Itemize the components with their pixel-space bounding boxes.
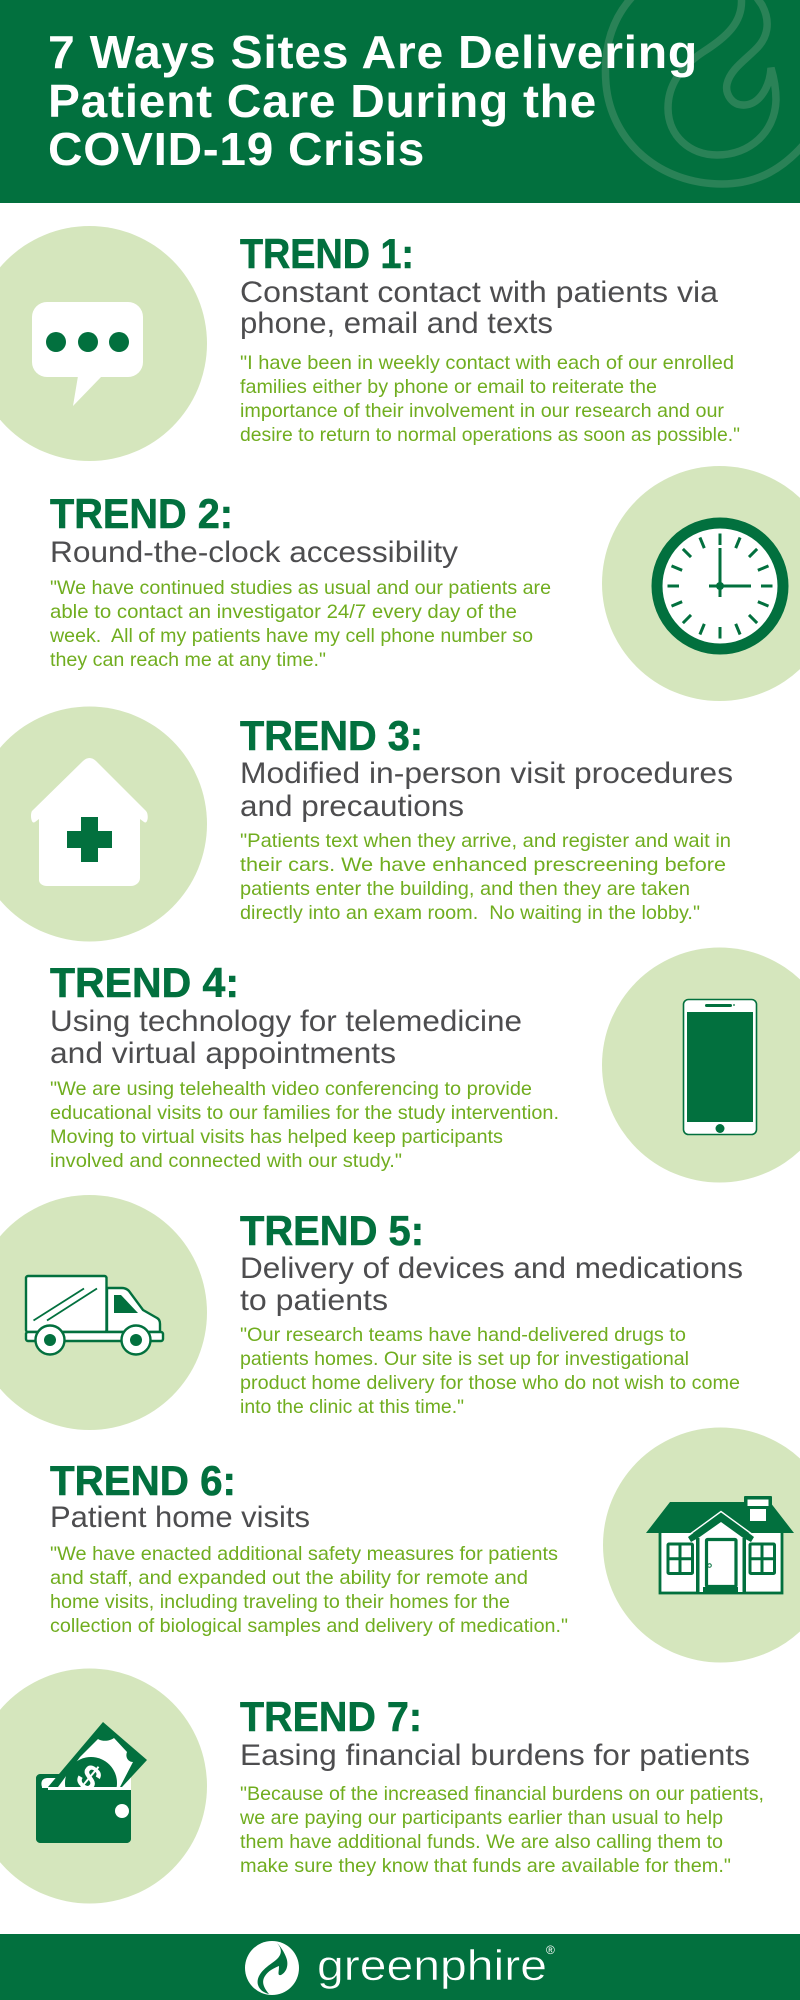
quote: trend 6: [50, 1543, 568, 1637]
subheading: trend 4: [50, 1005, 522, 1070]
heading: trend 2: TREND 2:: [50, 490, 233, 537]
panel: trend 2: [49, 466, 800, 701]
quote: trend 2: [49, 577, 551, 671]
logo wordmark: greenphire: [317, 1942, 547, 1990]
quote: trend 3: "Patients text when they arrive, and register and wait in: [240, 830, 731, 852]
logo wordmark: ®: [546, 1943, 555, 1957]
quote: trend 5: [240, 1324, 740, 1418]
quote: trend 4: "We are using telehealth video conferencing to provide: [50, 1078, 532, 1100]
icon: delivery truck: [0, 1195, 207, 1430]
icon: greenphire logo: [245, 1941, 299, 1995]
quote: trend 7: them have additional funds. We are also calling them to: [240, 1831, 723, 1853]
quote: trend 5: patients homes. Our site is set up for investigational: [240, 1348, 689, 1370]
panel: trend 3: [0, 706, 733, 942]
quote: trend 1: importance of their involvement in our research and our: [240, 400, 725, 422]
subheading: trend 5: to patients: [240, 1284, 388, 1317]
panel: trend 5: [0, 1195, 743, 1430]
subheading: trend 3: Modified in-person visit procedures: [240, 757, 733, 790]
heading: trend 7: TREND 7:: [240, 1693, 422, 1740]
quote: trend 5: into the clinic at this time.": [240, 1396, 464, 1418]
panel: trend 1: [0, 226, 740, 461]
quote: trend 2: able to contact an investigator 24/7 every day of the: [50, 601, 517, 623]
title: Patient Care During the: [48, 75, 597, 127]
subheading: trend 3: and precautions: [240, 790, 464, 823]
subheading: trend 4: Using technology for telemedicine: [50, 1005, 522, 1038]
subheading: trend 1: [240, 276, 719, 340]
icon: smartphone: [602, 948, 800, 1182]
footer band: [0, 1934, 800, 2000]
subheading: trend 5: [240, 1252, 743, 1317]
quote: trend 2: "We have continued studies as usual and our patients are: [50, 577, 551, 599]
quote: trend 3: directly into an exam room. No waiting in the lobby.": [240, 902, 700, 924]
heading: trend 1: TREND 1:: [240, 230, 414, 277]
quote: trend 4: [50, 1078, 559, 1172]
subheading: trend 4: and virtual appointments: [50, 1037, 396, 1070]
header banner: [0, 0, 800, 203]
heading: trend 4: TREND 4:: [50, 959, 239, 1006]
quote: trend 5: product home delivery for those who do not wish to come: [240, 1372, 740, 1394]
quote: trend 6: "We have enacted additional safety measures for patients: [50, 1543, 558, 1565]
quote: trend 1: [240, 352, 740, 446]
icon: clock: [602, 466, 800, 701]
subheading: trend 5: Delivery of devices and medications: [240, 1252, 743, 1285]
subheading: trend 1: Constant contact with patients via: [240, 276, 719, 309]
panel: trend 6: [50, 1428, 800, 1662]
quote: trend 3: [240, 830, 731, 924]
title: [48, 26, 698, 175]
quote: trend 7: make sure they know that funds are available for them.": [240, 1855, 731, 1877]
quote: trend 3: patients enter the building, and then they are taken: [240, 878, 690, 900]
heading: trend 6: TREND 6:: [50, 1457, 236, 1504]
heading: trend 3: TREND 3:: [240, 712, 423, 759]
quote: trend 4: Moving to virtual visits has helped keep participants: [50, 1126, 503, 1148]
quote: trend 5: "Our research teams have hand-delivered drugs to: [240, 1324, 686, 1346]
quote: trend 7: "Because of the increased financial burdens on our patients,: [240, 1783, 764, 1805]
subheading: trend 1: phone, email and texts: [240, 307, 553, 340]
quote: trend 1: "I have been in weekly contact with each of our enrolled: [240, 352, 734, 374]
quote: trend 6: home visits, including traveling to their homes for the: [50, 1591, 510, 1613]
quote: trend 7: [239, 1783, 764, 1877]
heading: trend 5: TREND 5:: [240, 1207, 424, 1254]
icon: wallet with banknote: [0, 1668, 207, 1904]
subheading: trend 2: Round-the-clock accessibility: [50, 536, 458, 569]
icon: wallet with banknote: $: [68, 1755, 110, 1800]
quote: trend 7: we are paying our participants earlier than usual to help: [239, 1807, 723, 1829]
panel: trend 7: [0, 1668, 764, 1904]
icon: medical house: [0, 706, 207, 942]
subheading: trend 6: Patient home visits: [50, 1501, 310, 1534]
title: COVID-19 Crisis: [48, 123, 425, 175]
quote: trend 2: they can reach me at any time.": [50, 649, 326, 671]
quote: trend 3: their cars. We have enhanced prescreening before: [240, 854, 726, 876]
quote: trend 4: involved and connected with our study.": [50, 1150, 402, 1172]
subheading: trend 3: [240, 757, 733, 823]
panel: trend 4: [50, 948, 800, 1182]
quote: trend 4: educational visits to our families for the study intervention.: [50, 1102, 559, 1124]
title: 7 Ways Sites Are Delivering: [48, 26, 698, 78]
quote: trend 1: families either by phone or email to reiterate the: [240, 376, 657, 398]
icon: home with chimney: [603, 1428, 800, 1662]
quote: trend 1: desire to return to normal operations as soon as possible.": [240, 424, 740, 446]
icon: speech bubble: [0, 226, 207, 461]
quote: trend 2: week. All of my patients have my cell phone number so: [49, 625, 533, 647]
quote: trend 6: collection of biological samples and delivery of medication.": [50, 1615, 568, 1637]
watermark: flame logo: [605, 0, 800, 184]
subheading: trend 7: Easing financial burdens for patients: [240, 1739, 750, 1772]
quote: trend 6: and staff, and expanded out the ability for remote and: [50, 1567, 528, 1589]
